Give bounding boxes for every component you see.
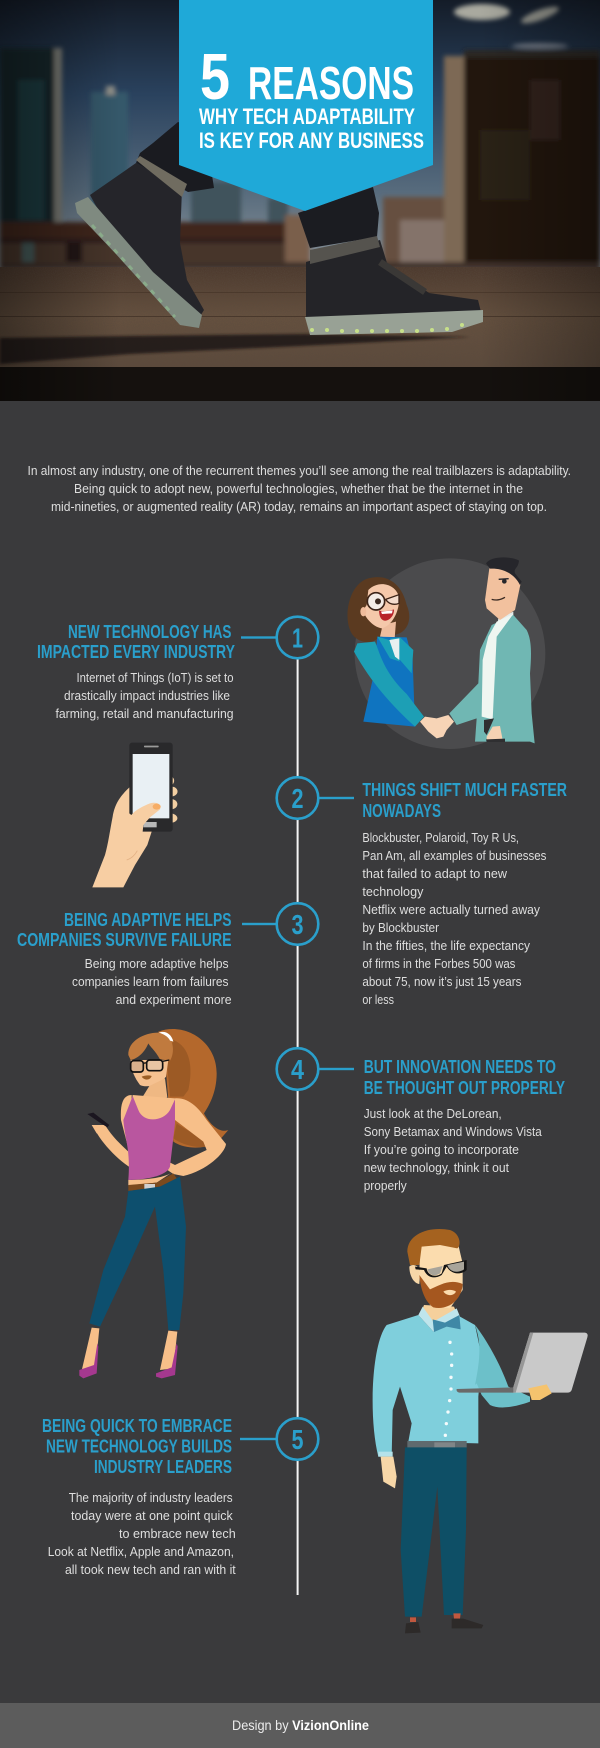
step 2 text: Netflix were actually turned away — [362, 903, 541, 917]
step 4 text: If you’re going to incorporate — [364, 1143, 519, 1157]
step 1 heading: NEW TECHNOLOGY HAS — [68, 622, 232, 642]
step 2 heading: NOWADAYS — [362, 801, 441, 821]
step 3 number circle — [277, 903, 318, 945]
step 3 number circle: 3 — [292, 909, 304, 940]
footer credit: Design by VizionOnline — [232, 1718, 369, 1733]
step 4 text: new technology, think it out — [364, 1161, 509, 1175]
step 4 connector — [319, 1068, 354, 1070]
step 2 number circle — [277, 777, 318, 819]
man — [449, 557, 535, 743]
footer bar — [0, 1703, 600, 1748]
step 5 heading: INDUSTRY LEADERS — [94, 1457, 232, 1477]
illustration: bearded man with laptop — [373, 1229, 588, 1633]
step 5 text: The majority of industry leaders — [69, 1491, 233, 1505]
step 1 heading: IMPACTED EVERY INDUSTRY — [37, 642, 235, 662]
left sneaker — [75, 122, 214, 328]
step 5 text: Look at Netflix, Apple and Amazon, — [48, 1545, 234, 1559]
step 3 heading — [17, 910, 232, 950]
step 2 heading — [362, 780, 567, 821]
illustration: hand holding smartphone — [92, 743, 178, 887]
step 2 text: that failed to adapt to new — [362, 867, 508, 881]
clasped hands — [420, 715, 454, 738]
step 5 connector — [240, 1438, 277, 1440]
step 5 text: all took new tech and ran with it — [65, 1563, 236, 1577]
step 5 text: to embrace new tech — [119, 1527, 236, 1541]
step 2 text: or less — [362, 993, 394, 1007]
step 5 heading: NEW TECHNOLOGY BUILDS — [46, 1437, 232, 1457]
intro paragraph: mid-nineties, or augmented reality (AR) today, remains an important aspect of staying on top. — [51, 500, 547, 514]
step 2 text: Pan Am, all examples of businesses — [362, 849, 546, 863]
step 5 number circle: 5 — [292, 1424, 304, 1455]
step 4 text: Sony Betamax and Windows Vista — [364, 1125, 542, 1139]
step 5 — [42, 1416, 318, 1577]
illustration: business handshake — [347, 557, 545, 749]
step 1 connector — [241, 636, 277, 639]
step 4 heading — [364, 1057, 565, 1098]
step 1 text: Internet of Things (IoT) is set to — [76, 671, 234, 685]
right sneaker — [298, 187, 483, 335]
step 5 text: today were at one point quick — [71, 1509, 233, 1523]
step 2 text: In the fifties, the life expectancy — [362, 939, 531, 953]
step 4 text: properly — [364, 1179, 407, 1193]
step 1 text — [56, 671, 234, 721]
step 4 number circle: 4 — [291, 1054, 304, 1085]
step 2 text: of firms in the Forbes 500 was — [362, 957, 515, 971]
title: 5 reasons: REASONS — [248, 57, 414, 109]
intro paragraph: In almost any industry, one of the recurrent themes you’ll see among the real trailblazers is adaptability. — [28, 464, 571, 478]
step 3 heading: BEING ADAPTIVE HELPS — [64, 910, 232, 930]
step 2 number circle: 2 — [292, 783, 304, 814]
step 3 — [17, 903, 318, 1007]
step 5 text — [48, 1491, 236, 1577]
step 1 number circle: 1 — [292, 622, 303, 654]
step 2 text: Blockbuster, Polaroid, Toy R Us, — [362, 831, 519, 845]
step 3 connector — [242, 923, 277, 925]
woman — [347, 577, 424, 727]
subtitle — [199, 104, 424, 153]
step 2 connector — [319, 797, 354, 799]
step 5 heading: BEING QUICK TO EMBRACE — [42, 1416, 232, 1436]
step 2 text — [362, 831, 546, 1007]
title: 5 reasons: 5 — [200, 40, 230, 113]
step 1 — [37, 617, 318, 721]
intro paragraph: Being quick to adopt new, powerful technologies, whether that be the internet in the — [74, 482, 523, 496]
step 4 text: Just look at the DeLorean, — [364, 1107, 502, 1121]
step 3 heading: COMPANIES SURVIVE FAILURE — [17, 930, 232, 950]
step 5 number circle — [277, 1418, 318, 1460]
step 4 number circle — [277, 1048, 318, 1090]
step 2 text: about 75, now it’s just 15 years — [362, 975, 521, 989]
step 1 text: drastically impact industries like — [64, 689, 230, 703]
title: 5 reasons — [200, 40, 414, 113]
step 3 text: companies learn from failures — [72, 975, 228, 989]
title banner — [179, 0, 433, 211]
subtitle: WHY TECH ADAPTABILITY — [199, 104, 415, 129]
step 4 text — [364, 1107, 542, 1193]
subtitle: IS KEY FOR ANY BUSINESS — [199, 128, 424, 153]
illustration: woman with phone — [79, 1029, 228, 1378]
step 1 text: farming, retail and manufacturing — [56, 707, 234, 721]
timeline line — [297, 658, 299, 1595]
step 1 heading — [37, 622, 235, 662]
step 1 number circle — [277, 617, 318, 658]
step 3 text: and experiment more — [116, 993, 232, 1007]
step 2 — [277, 777, 567, 1007]
step 4 — [277, 1048, 565, 1193]
step 3 text: Being more adaptive helps — [85, 957, 229, 971]
intro paragraph — [28, 464, 571, 514]
step 2 text: technology — [362, 885, 424, 899]
hero photo: walking sneakers on a rooftop — [0, 0, 600, 401]
step 2 text: by Blockbuster — [362, 921, 439, 935]
step 5 heading — [42, 1416, 232, 1477]
cast shadow — [0, 334, 470, 364]
step 3 text — [72, 957, 232, 1007]
